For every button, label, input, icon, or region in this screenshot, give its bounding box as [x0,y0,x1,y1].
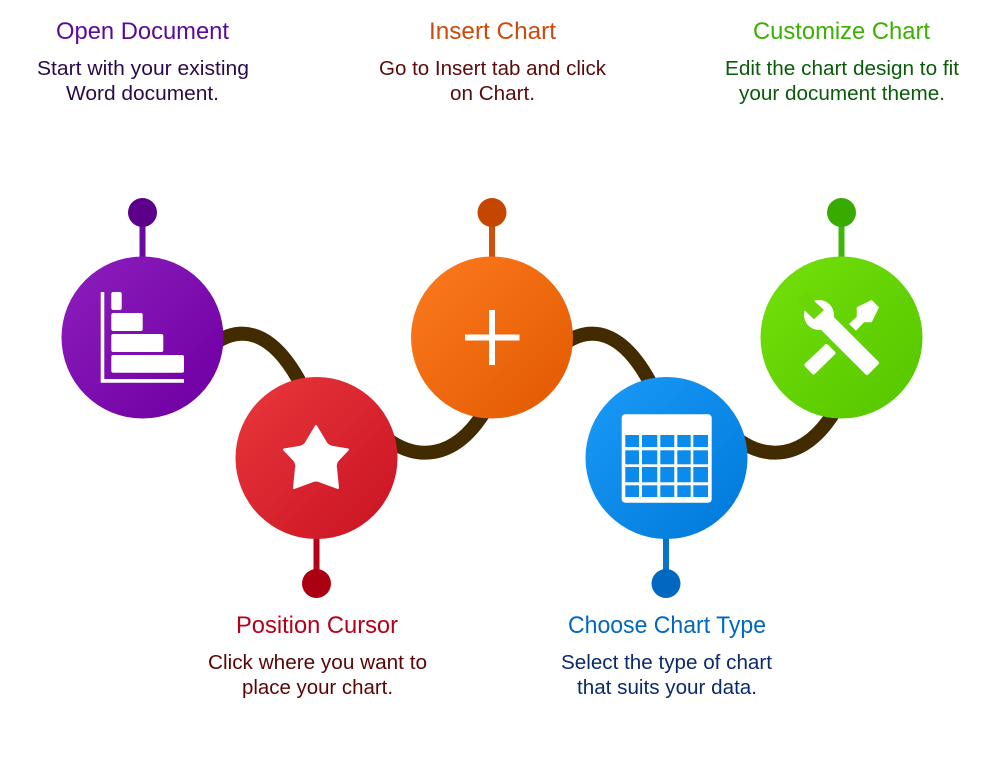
circle [760,256,922,418]
step 4: Choose Chart Type [561,377,772,699]
description: Go to Insert tab and click [379,58,607,80]
icon: table [622,414,712,503]
description: Start with your existing [37,58,249,80]
connector: step 3 to step 4 [565,334,652,386]
description [561,652,772,699]
heading: Insert Chart [429,18,556,45]
connector: step 2 to step 3 [390,414,483,453]
heading: Customize Chart [753,18,930,45]
pin [652,535,680,598]
description [725,58,959,105]
description: your document theme. [739,83,945,105]
description [37,58,249,105]
step 5: Customize Chart [725,18,959,418]
step 1: Open Document [37,18,249,418]
pin [827,198,856,260]
description [379,58,607,105]
icon: bar chart [101,292,184,383]
pin [478,198,506,260]
icon: star [284,426,348,488]
description: Word document. [66,83,219,105]
description: Edit the chart design to fit [725,58,959,80]
description: place your chart. [242,677,393,699]
icon: wrench and screwdriver [796,292,879,373]
heading: Position Cursor [236,612,398,639]
pin [302,535,331,598]
connector: step 1 to step 2 [215,334,302,386]
description: Select the type of chart [561,652,772,674]
circle [411,256,573,418]
heading: Choose Chart Type [568,612,766,639]
heading: Open Document [56,18,229,45]
description: on Chart. [450,83,535,105]
description [208,652,427,699]
circle [236,377,398,539]
connector: step 4 to step 5 [740,414,833,453]
pin [128,198,157,260]
icon: plus [465,310,520,365]
step 2: Position Cursor [208,377,427,699]
circle [62,256,224,418]
step 3: Insert Chart [379,18,607,418]
circle [586,377,748,539]
description: Click where you want to [208,652,427,674]
description: that suits your data. [577,677,757,699]
